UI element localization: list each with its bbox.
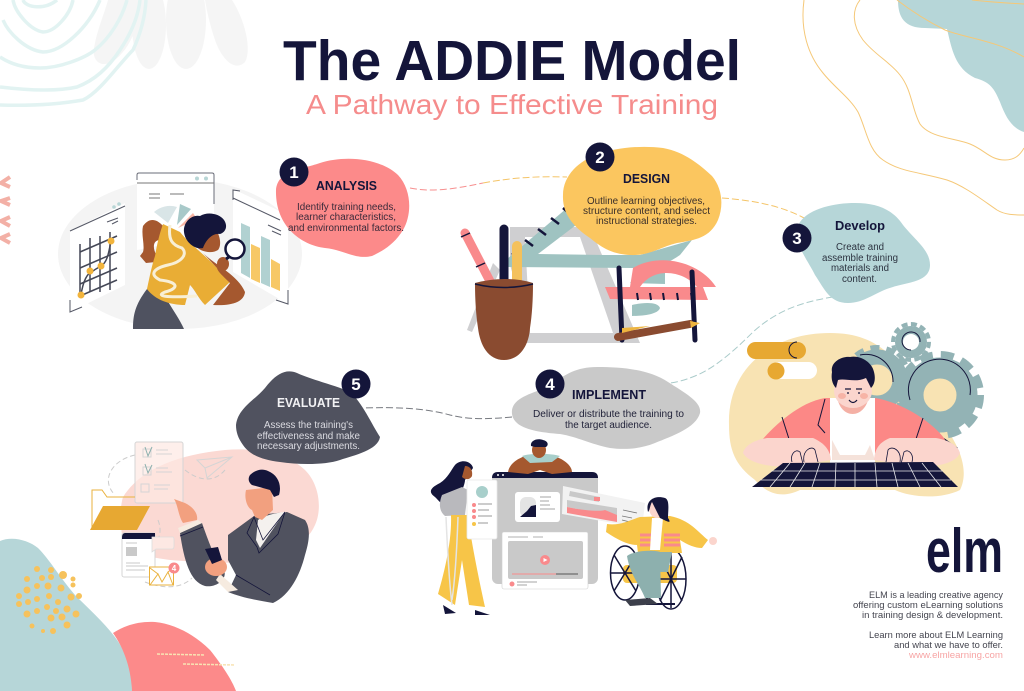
envelope: [150, 562, 180, 585]
person neck: [837, 385, 869, 414]
badge 4: [536, 370, 564, 398]
man pointing hand: [174, 499, 197, 523]
evaluate body: necessary adjustments.: [257, 441, 360, 452]
man on top of window: [508, 439, 572, 474]
seat: [623, 565, 677, 583]
floating card: [562, 486, 645, 528]
panel: evaluate: [236, 370, 380, 464]
badge 5: 5: [351, 375, 361, 394]
easel: [467, 227, 640, 343]
man face: [245, 487, 273, 520]
illustration: implement: [431, 439, 717, 615]
image card: [515, 492, 560, 522]
set square ticks: [512, 208, 570, 259]
develop body: content.: [842, 274, 877, 285]
person torso: [748, 398, 958, 464]
decoration: top-left petals: [94, 0, 248, 69]
decoration: yellow dots: [16, 566, 82, 634]
develop body: materials and: [831, 263, 889, 274]
footer text: www.elmlearning.com: [908, 650, 1003, 661]
keyboard: [752, 462, 958, 487]
pen: [618, 321, 700, 337]
analysis blob: [276, 159, 409, 257]
badge 2: [586, 142, 614, 172]
footer text: in training design & development.: [862, 610, 1003, 621]
woman face: [193, 228, 220, 252]
decoration: left chevrons: [1, 177, 10, 243]
legs: [627, 551, 672, 598]
teal set square: [500, 208, 692, 268]
connector: design to develop: [722, 198, 804, 218]
hair: [647, 497, 670, 522]
person cheeks: [838, 393, 868, 399]
analysis body: and environmental factors.: [288, 223, 404, 234]
illustration: analysis: [58, 173, 302, 329]
analysis body: [288, 202, 404, 234]
profile card: [467, 480, 497, 539]
right bar chart window: [233, 189, 288, 304]
footer text: offering custom eLearning solutions: [853, 600, 1003, 611]
person fingers: [792, 448, 912, 464]
woman shirt: [147, 224, 230, 305]
woman in wheelchair: [606, 497, 717, 609]
woman hair: [184, 213, 226, 248]
person face: [834, 374, 872, 408]
woman with card: [431, 461, 490, 615]
man hand with phone: [205, 547, 227, 576]
woman front arm: [203, 253, 245, 305]
panel: design: [563, 142, 721, 255]
gears: [845, 324, 980, 435]
vest stripes: [640, 535, 680, 545]
dashed circle arcs: [108, 455, 225, 587]
develop body: assemble training: [822, 253, 898, 264]
footer text: and what we have to offer.: [894, 640, 1003, 651]
design heading: DESIGN: [623, 172, 670, 186]
woman back arm: [140, 220, 163, 263]
video card: [502, 532, 588, 589]
design body: [583, 196, 710, 227]
analysis body: learner characteristics,: [296, 212, 396, 223]
evaluate body: Assess the training's: [264, 420, 353, 431]
large browser window: [492, 472, 598, 584]
connector: develop to implement: [670, 297, 833, 383]
white top: [650, 518, 663, 550]
illustration: design tools: [461, 208, 716, 360]
badge 3: 3: [792, 229, 802, 248]
develop heading: Develop: [835, 219, 885, 233]
person facial features: [845, 389, 862, 402]
develop body: Create and: [836, 242, 884, 253]
navy rulers: [619, 268, 695, 340]
jacket: [606, 516, 708, 553]
evaluate blob: [236, 371, 380, 464]
brown cup: [475, 279, 533, 360]
connector: implement to evaluate: [363, 408, 512, 419]
analysis body: Identify training needs,: [297, 202, 396, 213]
decoration: top-left spiral: [0, 0, 146, 105]
woman shirt squiggle: [154, 225, 197, 297]
man hair: [249, 470, 280, 497]
panel: implement: [512, 367, 700, 449]
decoration: bottom coral blob: [113, 622, 236, 691]
illustration: evaluate: [90, 442, 319, 603]
badge 1: 1: [289, 163, 299, 182]
implement body: Deliver or distribute the training to: [533, 409, 684, 420]
implement body: the target audience.: [565, 420, 652, 431]
implement blob: [512, 367, 700, 449]
decoration: bottom-left teal blob: [0, 539, 132, 691]
chat bubble: [152, 537, 174, 552]
illustration: develop: [729, 324, 980, 496]
develop blob: [797, 203, 930, 303]
yellow tool: [512, 246, 522, 287]
title: The ADDIE Model: [283, 29, 741, 93]
gray background ellipse: [58, 179, 302, 329]
badge 2: 2: [595, 148, 605, 167]
person hair: [832, 357, 875, 388]
decoration: cream squiggles: [157, 654, 235, 665]
footer text: [853, 590, 1003, 661]
design body: structure content, and select: [583, 206, 710, 217]
paper airplane: [197, 457, 232, 478]
footer text: Learn more about ELM Learning: [869, 630, 1003, 641]
implement heading: IMPLEMENT: [572, 388, 646, 402]
footer text: ELM is a leading creative agency: [869, 590, 1003, 601]
protractor: [605, 260, 716, 300]
evaluate heading: EVALUATE: [277, 396, 340, 410]
panel: analysis: [276, 158, 409, 257]
woman pants: [133, 289, 184, 329]
design body: Outline learning objectives,: [587, 196, 705, 207]
wheels: [610, 546, 686, 609]
cream background blob: [729, 333, 964, 496]
envelope: 4: [172, 564, 177, 573]
decoration: top-right teal blob: [898, 0, 1024, 132]
implement body: [533, 409, 684, 431]
connector: analysis to design: [410, 177, 567, 190]
teal leaf shapes: [630, 265, 665, 316]
analysis heading: ANALYSIS: [316, 179, 377, 193]
magnifying glass: [226, 240, 244, 259]
evaluate body: [257, 420, 360, 452]
center window: [137, 173, 214, 250]
badge 5: [342, 370, 370, 398]
badge 4: 4: [545, 375, 555, 394]
man jacket: [178, 512, 309, 603]
browser card: [122, 533, 155, 577]
shoes: [625, 598, 658, 606]
panel: develop: [782, 203, 930, 303]
subtitle: A Pathway to Effective Training: [306, 89, 718, 120]
develop body: [822, 242, 898, 285]
face: [649, 498, 665, 518]
pink pencil: [461, 233, 493, 287]
badge 3: [782, 224, 812, 252]
evaluate body: effectiveness and make: [257, 431, 360, 442]
person arms: [743, 438, 960, 467]
left chart window: [70, 202, 125, 312]
pink background blob: [121, 449, 319, 563]
hand: [709, 537, 717, 545]
toggle switches: [747, 342, 817, 380]
checklist: [135, 442, 183, 503]
design blob: [563, 147, 721, 255]
woman hand: [217, 257, 229, 271]
design body: instructional strategies.: [596, 216, 697, 227]
navy tool: [500, 229, 508, 287]
folder: [90, 490, 150, 530]
decoration: top-right curved lines: [803, 0, 1024, 215]
